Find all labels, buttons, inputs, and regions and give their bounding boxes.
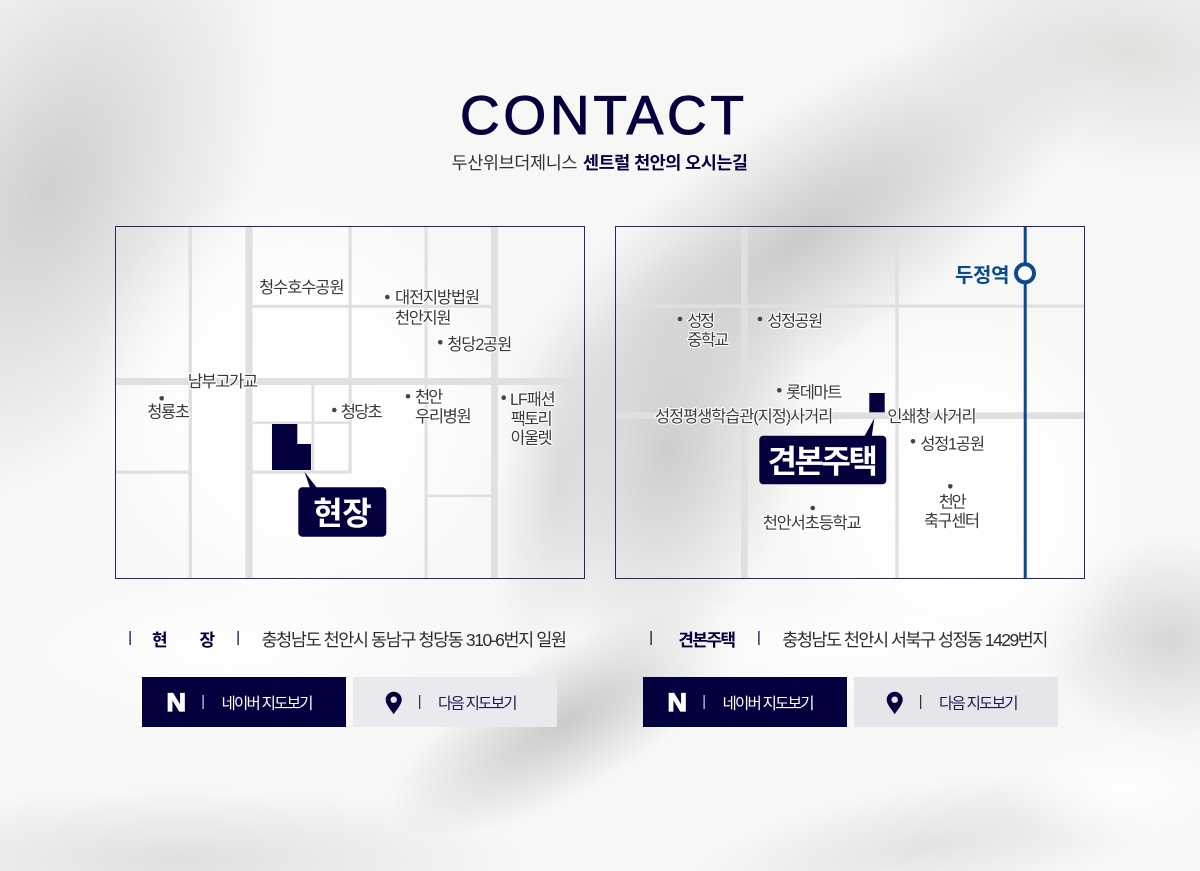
button: naver map (model house): 네이버 지도보기 [722,694,814,712]
subway station: 두정역 [955,264,1034,287]
callout: 현장 [298,487,386,537]
callout: 견본주택 [759,436,886,484]
place labels [655,312,985,532]
address: model house: 견본주택 [678,631,736,650]
address: model house [650,630,1048,650]
subtitle [452,153,748,173]
place labels: 성정1공원 [920,434,985,454]
address: model house: 충청남도 천안시 서북구 성정동 1429번지 [782,630,1048,650]
button: daum map (model house) [854,677,1058,727]
subtitle: 두산위브더제니스 [452,153,578,173]
model house marker [869,393,885,412]
place labels: 팩토리 [511,410,553,428]
place labels [147,278,556,448]
address: site [130,630,567,650]
place labels: 청수호수공원 [259,278,344,297]
subway line [1024,227,1027,578]
button: naver map (model house) [643,677,847,727]
place labels: 청룡초 [147,402,190,422]
map border [616,226,1084,578]
callout: 견본주택: 견본주택 [768,444,878,480]
place labels: 남부고가교 [188,372,258,391]
place labels: 축구센터 [924,512,980,530]
button: daum map (site): 다음 지도보기 [438,694,518,712]
place labels: 성정 [687,312,715,330]
icon: naver N: N [668,689,687,717]
panel: site map [116,226,584,578]
icon: map pin [887,692,903,714]
callout pointer [304,472,317,488]
icon: naver N: N [166,689,186,717]
place labels: LF패션 [510,390,556,409]
place labels: 천안 [415,388,443,406]
button: daum map (model house): 다음 지도보기 [939,694,1018,712]
place labels: 청당2공원 [447,335,512,354]
place labels: 천안 [939,492,967,512]
address: site: 충청남도 천안시 동남구 청당동 310-6번지 일원 [262,630,567,650]
button: daum map (site) [353,677,557,727]
map roads [116,227,584,578]
subtitle: 센트럴 천안의 오시는길 [583,153,748,173]
callout: 현장: 현장 [313,496,372,532]
panel: model house map [616,226,1084,578]
place labels: 중학교 [687,330,729,350]
place labels: 성정평생학습관(지정)사거리 [655,407,833,426]
address: site: 현 [152,631,168,650]
site building marker [272,424,311,470]
place labels: 대전지방법원 [395,288,480,307]
map border [116,226,584,578]
place labels: 인쇄창 사거리 [887,407,977,426]
button: naver map (site) [142,677,346,727]
callout pointer [864,418,874,437]
place labels: 성정공원 [767,312,823,330]
place labels: 청당초 [341,402,383,422]
place labels: 천안서초등학교 [763,514,862,532]
place labels: 천안지원 [395,308,452,328]
address: site: 장 [200,631,216,650]
place labels: 롯데마트 [786,383,842,402]
map roads [616,227,1084,578]
icon: map pin [386,692,402,714]
place labels: 아울렛 [511,428,553,448]
title: CONTACT [460,84,744,146]
place labels: 우리병원 [415,407,472,426]
subway station: 두정역: 두정역 [955,264,1010,287]
button: naver map (site): 네이버 지도보기 [222,694,314,712]
